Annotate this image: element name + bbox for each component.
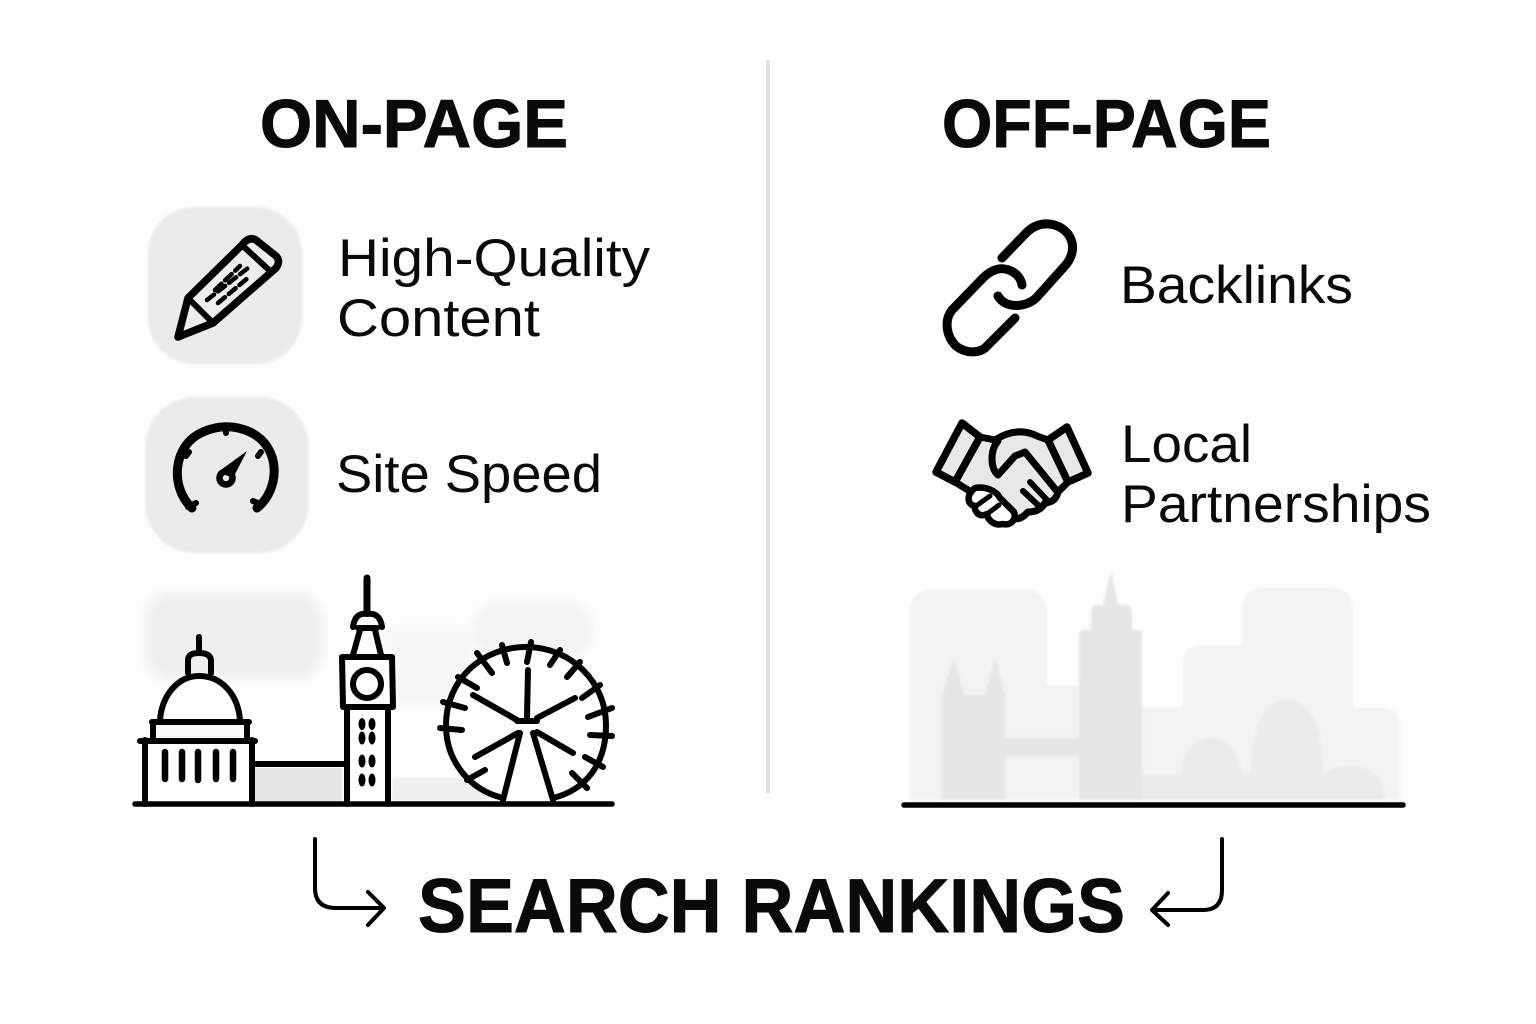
- landmark: domed cathedral: [140, 637, 255, 804]
- skyline: faded grey silhouette: [904, 570, 1403, 805]
- heading: on-page: ON-PAGE: [260, 86, 568, 162]
- text: local partnerships: [1121, 415, 1431, 534]
- heading: off-page: OFF-PAGE: [942, 86, 1271, 162]
- text: high-quality content: [337, 229, 651, 348]
- text: site speed: Site Speed: [336, 445, 602, 504]
- icon: chain link: [947, 224, 1073, 352]
- ground line: [904, 802, 1403, 808]
- ground line: [135, 801, 612, 807]
- arrow: right into search rankings: [1152, 839, 1222, 925]
- landmark: clock tower: [342, 578, 393, 804]
- landmark: link wall: [255, 761, 343, 767]
- text: high-quality content: High-Quality: [338, 229, 651, 288]
- title: search rankings: SEARCH RANKINGS: [418, 864, 1125, 949]
- skyline: london landmarks outline: [135, 578, 612, 804]
- icon: pencil on grey tile: [148, 207, 302, 364]
- text: backlinks: Backlinks: [1120, 256, 1353, 315]
- icon: speedometer on grey tile: [145, 397, 309, 553]
- text: high-quality content: Content: [337, 289, 540, 348]
- text: local partnerships: Partnerships: [1121, 475, 1431, 534]
- arrow: left into search rankings: [315, 839, 384, 925]
- icon: handshake: [936, 423, 1088, 524]
- text: local partnerships: Local: [1121, 415, 1252, 474]
- landmark: ferris wheel: [440, 642, 612, 804]
